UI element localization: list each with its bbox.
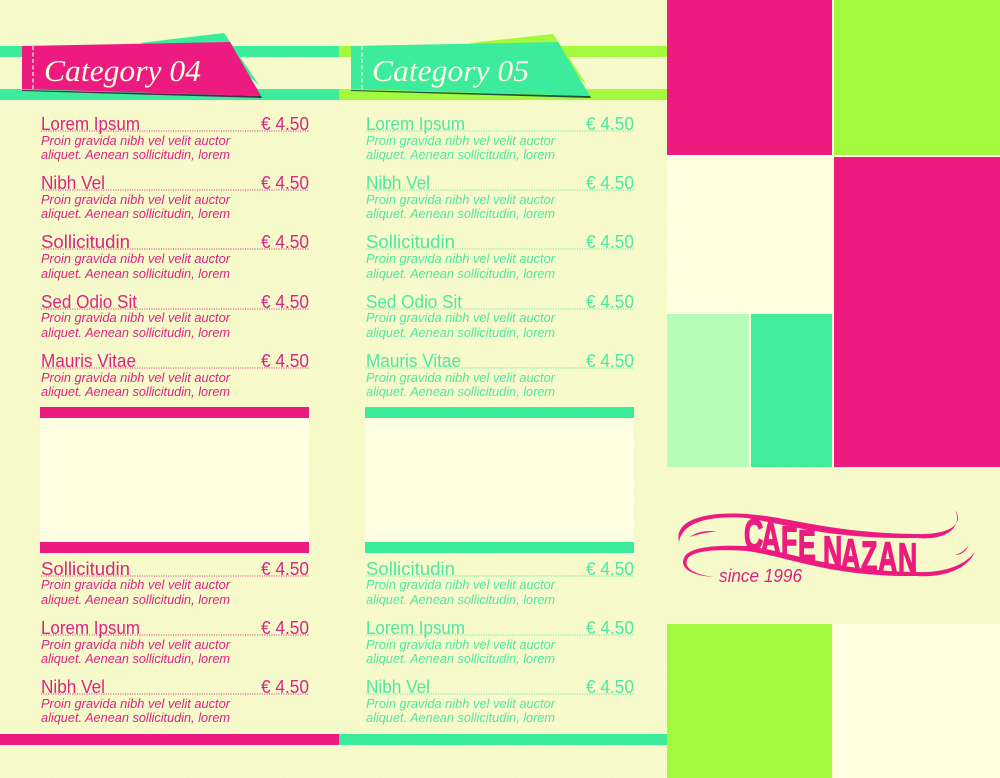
item: Sed Odio Sit: Sed Odio Sit (366, 292, 462, 312)
item: Sollicitudin: aliquet. Aenean sollicitudin, lorem (41, 266, 230, 281)
item: Mauris Vitae: € 4.50 (261, 351, 309, 371)
item: Sed Odio Sit: aliquet. Aenean sollicitudin, lorem (41, 325, 230, 340)
item: Mauris Vitae (366, 351, 634, 399)
item: Nibh Vel: Proin gravida nibh vel velit auctor (366, 192, 556, 207)
item: Nibh Vel: aliquet. Aenean sollicitudin, lorem (41, 710, 230, 725)
item: Nibh Vel: Nibh Vel (366, 173, 430, 193)
menu column: category 04 items, lower (41, 559, 309, 725)
item: Lorem Ipsum: € 4.50 (586, 618, 634, 638)
colour block panel: bottom right (667, 624, 1000, 778)
item: Nibh Vel: Nibh Vel (41, 173, 105, 193)
item: Nibh Vel: aliquet. Aenean sollicitudin, lorem (366, 710, 555, 725)
item: Lorem Ipsum: € 4.50 (261, 114, 309, 134)
item: Nibh Vel: Proin gravida nibh vel velit auctor (41, 696, 231, 711)
item: Nibh Vel: Nibh Vel (366, 677, 430, 697)
item: Sollicitudin: € 4.50 (261, 559, 309, 579)
item: Nibh Vel: € 4.50 (586, 173, 634, 193)
item: Nibh Vel: Nibh Vel (41, 677, 105, 697)
brand name: Z (861, 533, 877, 581)
item: Sollicitudin: Proin gravida nibh vel velit auctor (366, 577, 556, 592)
item: Sed Odio Sit: Proin gravida nibh vel velit auctor (366, 310, 556, 325)
item: Mauris Vitae: Mauris Vitae (366, 351, 461, 371)
item: Sollicitudin: Proin gravida nibh vel velit auctor (41, 577, 231, 592)
item: Nibh Vel (366, 677, 634, 725)
item: Lorem Ipsum: Proin gravida nibh vel velit auctor (41, 133, 231, 148)
ribbon strokes (678, 510, 975, 577)
brand name: N (823, 528, 842, 576)
item: Nibh Vel (41, 677, 309, 725)
item: Sed Odio Sit: Sed Odio Sit (41, 292, 137, 312)
item: Nibh Vel: Proin gravida nibh vel velit auctor (41, 192, 231, 207)
brand name: E (798, 522, 816, 570)
item: Sollicitudin (366, 559, 634, 607)
item: Sollicitudin: aliquet. Aenean sollicitudin, lorem (366, 592, 555, 607)
item: Sed Odio Sit (41, 292, 309, 340)
item: Sollicitudin: € 4.50 (261, 232, 309, 252)
item: Sollicitudin: aliquet. Aenean sollicitudin, lorem (41, 592, 230, 607)
item: Sollicitudin: € 4.50 (586, 232, 634, 252)
heading banner: Category 05: Category 05 (372, 53, 529, 88)
item: Lorem Ipsum: Proin gravida nibh vel velit auctor (41, 637, 231, 652)
brand name: F (781, 518, 797, 566)
item: Nibh Vel: Proin gravida nibh vel velit auctor (366, 696, 556, 711)
item: Lorem Ipsum: Lorem Ipsum (41, 618, 140, 638)
item: Sollicitudin (366, 232, 634, 281)
brand name: A (878, 534, 897, 582)
item: Nibh Vel: aliquet. Aenean sollicitudin, lorem (41, 206, 230, 221)
brand name (744, 511, 917, 583)
item: Nibh Vel (41, 173, 309, 221)
item: Lorem Ipsum: Proin gravida nibh vel velit auctor (366, 133, 556, 148)
image placeholder: category 04 (40, 407, 309, 553)
item: Sollicitudin (41, 559, 309, 607)
item: Nibh Vel: € 4.50 (261, 173, 309, 193)
band: category 04 top and bottom stripes (0, 46, 339, 100)
item: Lorem Ipsum: aliquet. Aenean sollicitudin, lorem (41, 651, 230, 666)
brand name: C (744, 511, 763, 559)
heading banner: Category 04 (22, 33, 262, 98)
item: Nibh Vel: aliquet. Aenean sollicitudin, lorem (366, 206, 555, 221)
menu column: category 05 items, lower (366, 559, 634, 725)
menu column: category 04 items, upper (41, 114, 309, 399)
item: Lorem Ipsum (41, 618, 309, 666)
item: Sollicitudin: Sollicitudin (41, 559, 130, 579)
item: Lorem Ipsum (366, 114, 634, 162)
brand name: A (761, 514, 780, 562)
item: Mauris Vitae: Mauris Vitae (41, 351, 136, 371)
image placeholder: category 05 (365, 407, 634, 553)
band: category 05 top and bottom stripes (339, 46, 667, 100)
item: Sollicitudin: € 4.50 (586, 559, 634, 579)
item: Mauris Vitae: € 4.50 (586, 351, 634, 371)
heading banner: Category 04: Category 04 (44, 53, 201, 88)
item: Sed Odio Sit (366, 292, 634, 340)
item: Mauris Vitae: aliquet. Aenean sollicitudin, lorem (366, 384, 555, 399)
item: Lorem Ipsum: € 4.50 (261, 618, 309, 638)
colour block panel: top right (667, 0, 1000, 467)
brand name: N (898, 535, 917, 583)
item: Sed Odio Sit: aliquet. Aenean sollicitudin, lorem (366, 325, 555, 340)
item: Sed Odio Sit: Proin gravida nibh vel velit auctor (41, 310, 231, 325)
item: Lorem Ipsum: Proin gravida nibh vel velit auctor (366, 637, 556, 652)
logo: Cafe Nazan ribbon (678, 510, 975, 586)
item: Lorem Ipsum: € 4.50 (586, 114, 634, 134)
item: Sollicitudin: Sollicitudin (366, 559, 455, 579)
footer bars (0, 734, 667, 745)
item: Sollicitudin: Sollicitudin (366, 232, 455, 252)
heading banner: Category 05 (351, 34, 591, 98)
item: Mauris Vitae (41, 351, 309, 399)
item: Nibh Vel: € 4.50 (261, 677, 309, 697)
item: Lorem Ipsum: Lorem Ipsum (41, 114, 140, 134)
item: Nibh Vel (366, 173, 634, 221)
item: Lorem Ipsum: Lorem Ipsum (366, 618, 465, 638)
item: Mauris Vitae: Proin gravida nibh vel velit auctor (366, 370, 556, 385)
item: Lorem Ipsum (366, 618, 634, 666)
item: Sollicitudin: Sollicitudin (41, 232, 130, 252)
item: Nibh Vel: € 4.50 (586, 677, 634, 697)
item: Sollicitudin (41, 232, 309, 281)
item: Sollicitudin: Proin gravida nibh vel velit auctor (41, 251, 231, 266)
item: Sollicitudin: aliquet. Aenean sollicitudin, lorem (366, 266, 555, 281)
item: Lorem Ipsum: aliquet. Aenean sollicitudin, lorem (366, 147, 555, 162)
item: Mauris Vitae: Proin gravida nibh vel velit auctor (41, 370, 231, 385)
item: Sollicitudin: Proin gravida nibh vel velit auctor (366, 251, 556, 266)
brand name: A (841, 531, 860, 579)
tagline: since 1996 (719, 566, 803, 586)
item: Sed Odio Sit: € 4.50 (586, 292, 634, 312)
item: Lorem Ipsum (41, 114, 309, 162)
item: Lorem Ipsum: aliquet. Aenean sollicitudin, lorem (41, 147, 230, 162)
menu column: category 05 items, upper (366, 114, 634, 399)
item: Lorem Ipsum: aliquet. Aenean sollicitudin, lorem (366, 651, 555, 666)
item: Sed Odio Sit: € 4.50 (261, 292, 309, 312)
item: Lorem Ipsum: Lorem Ipsum (366, 114, 465, 134)
item: Mauris Vitae: aliquet. Aenean sollicitudin, lorem (41, 384, 230, 399)
